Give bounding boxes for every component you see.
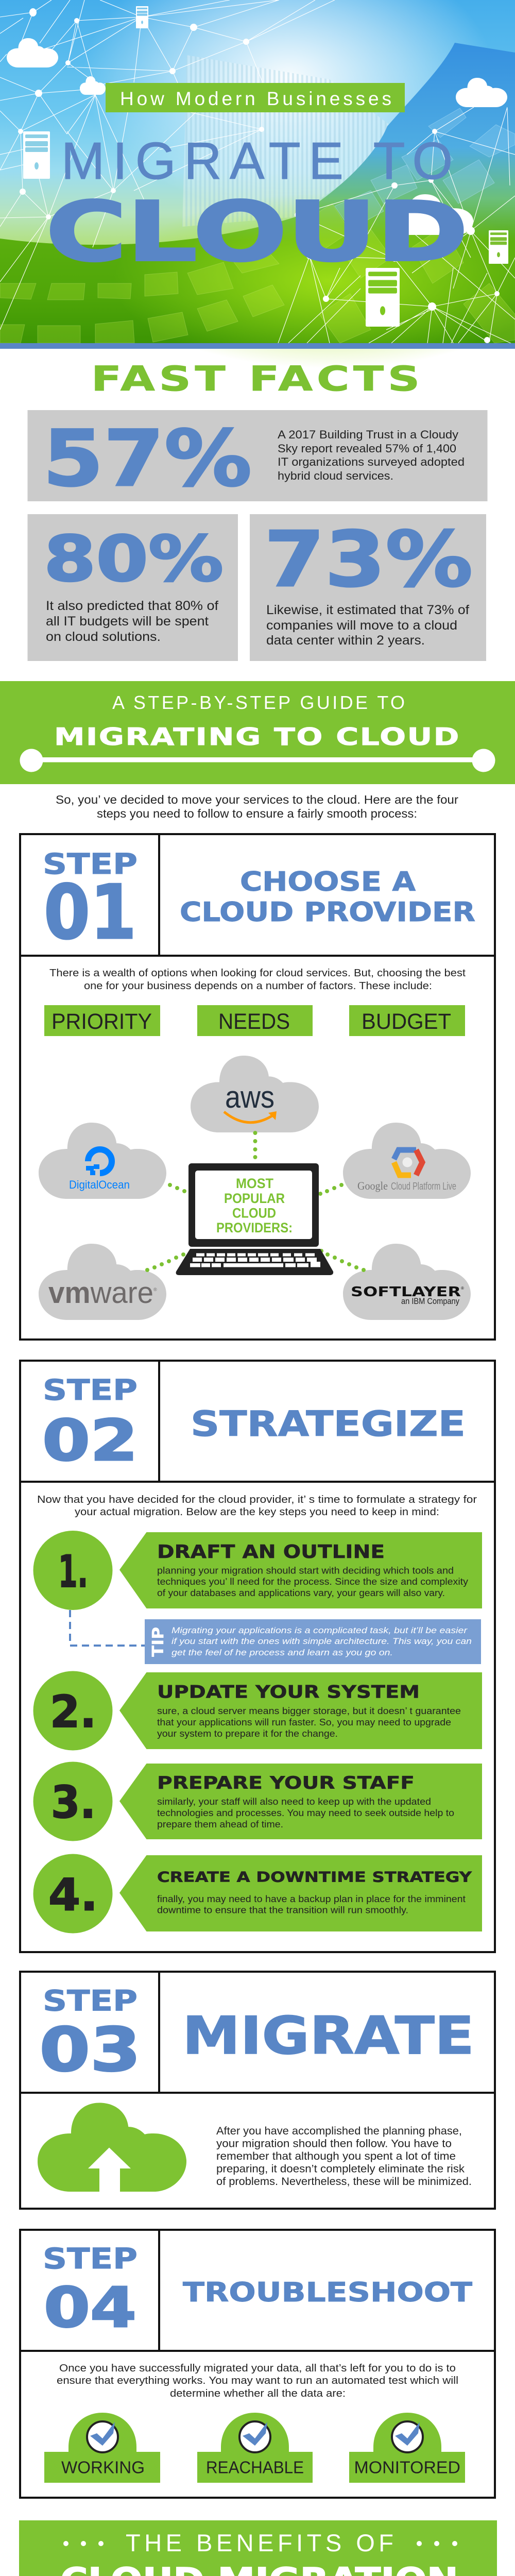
cloud: softlayer: ®: [461, 1286, 464, 1291]
tip callout: TIP: [149, 1627, 167, 1657]
step frame: [20, 1361, 495, 1952]
item 1: 1.: [58, 1546, 88, 1598]
banner kicker: A STEP-BY-STEP GUIDE TO: [112, 692, 405, 713]
panel: 73 percent fact: [250, 514, 486, 661]
icon: laptop: [176, 1163, 333, 1275]
panel: 80 percent fact: [28, 514, 238, 661]
panel: 57 percent fact: [28, 410, 487, 504]
heading: fast facts: FAST FACTS: [91, 359, 424, 399]
decorative dots: [63, 2541, 457, 2546]
step text: [216, 2125, 472, 2188]
curved building: [0, 43, 515, 343]
fact text: Likewise, it estimated that 73% of: [266, 603, 469, 617]
step text: determine whether all the data are:: [170, 2388, 346, 2399]
pale tower: [182, 55, 391, 227]
badge: working: [44, 2413, 160, 2483]
step frame: [20, 834, 495, 1340]
network lines: [0, 0, 515, 345]
laptop screen text: CLOUD: [232, 1206, 276, 1221]
badge: reachable: REACHABLE: [206, 2458, 304, 2477]
laptop screen text: [216, 1176, 293, 1235]
panel: step 02: [20, 1361, 495, 1952]
hero subtitle box: [106, 83, 405, 112]
badge: reachable: [197, 2413, 313, 2483]
fact text: companies will move to a cloud: [266, 618, 457, 633]
tip callout: [145, 1619, 481, 1664]
step intro text: [37, 1494, 477, 1518]
item 4: 4.: [48, 1869, 98, 1921]
hero subtitle box: How Modern Businesses: [120, 88, 391, 109]
cloud: google cloud platform: Cloud Platform Live: [391, 1181, 456, 1192]
step label: STEP: [43, 1985, 138, 2018]
fact text: A 2017 Building Trust in a Cloudy: [278, 428, 458, 441]
fact text: [278, 428, 465, 482]
step text: [57, 2363, 458, 2399]
cloud: google cloud platform: Google: [357, 1179, 388, 1192]
cloud: digitalocean: [39, 1123, 166, 1199]
icon: clouds: [7, 38, 507, 235]
item 3: 3.: [51, 1777, 96, 1828]
fact text: data center within 2 years.: [266, 633, 425, 648]
fact text: [46, 599, 218, 644]
lime light on building: [113, 193, 515, 368]
panel: benefits heading: [19, 2520, 497, 2576]
step intro text: [49, 967, 466, 992]
item 3: prepare them ahead of time.: [157, 1819, 283, 1829]
fact text: IT organizations surveyed adopted: [278, 455, 465, 468]
fact text: all IT budgets will be spent: [46, 614, 209, 629]
cloud: digitalocean: DigitalOcean: [69, 1178, 130, 1191]
icon: upload cloud: [38, 2103, 186, 2192]
tip callout: if you start with the ones with simple architecture. This way, you can: [171, 1636, 472, 1646]
item 1: DRAFT AN OUTLINE: [157, 1541, 385, 1563]
panel: step 03: [20, 1972, 495, 2209]
step intro text: Now that you have decided for the cloud provider, it’ s time to formulate a strategy for: [37, 1494, 477, 1505]
benefits kicker: THE BENEFITS OF: [126, 2529, 393, 2556]
intro text: steps you need to follow to ensure a fairly smooth process:: [97, 807, 417, 820]
stat: 73%: 73%: [264, 515, 473, 604]
hero light glow: [82, 0, 494, 211]
step label: STEP: [43, 1374, 138, 1406]
blue tower windows: [335, 108, 515, 229]
item 3: technologies and processes. You may need to seek outside help to: [157, 1808, 454, 1818]
step frame: [20, 1972, 495, 2209]
step text: of problems. Nevertheless, these will be minimized.: [216, 2176, 472, 2188]
tip callout: Migrating your applications is a complicated task, but it’ll be easier: [171, 1625, 468, 1635]
step text: remember that although you spent a lot of time: [216, 2150, 456, 2162]
factor: needs: NEEDS: [218, 1009, 290, 1034]
panel: step 01: [20, 834, 495, 1340]
step title: STRATEGIZE: [191, 1404, 466, 1445]
cloud: softlayer: SOFTLAYER: [351, 1284, 461, 1300]
step text: Once you have successfully migrated your data, all that’s left for you to do is to: [59, 2363, 456, 2374]
item 1: of your databases and applications vary, your gears will also vary.: [157, 1588, 445, 1598]
step number: 03: [39, 2014, 141, 2085]
cloud: aws: aws: [225, 1080, 274, 1114]
item 2: UPDATE YOUR SYSTEM: [157, 1682, 420, 1702]
hero title line 1: MIGRATE TO: [61, 132, 453, 190]
stat: 57%: 57%: [43, 414, 252, 504]
step text: After you have accomplished the planning phase,: [216, 2125, 462, 2137]
step title: MIGRATE: [182, 2005, 474, 2066]
laptop screen text: MOST: [236, 1176, 273, 1191]
item 1: planning your migration should start with deciding which tools and: [157, 1565, 454, 1575]
badge: monitored: [349, 2413, 465, 2483]
hero banner: [0, 0, 515, 368]
step text: preparing, it doesn’t completely eliminate the risk: [216, 2163, 465, 2175]
banner title: MIGRATING TO CLOUD: [54, 723, 460, 751]
item 2: sure, a cloud server means bigger storage, but it doesn’ t guarantee: [157, 1706, 461, 1716]
step number: 02: [42, 1408, 138, 1473]
badge: monitored: MONITORED: [354, 2458, 460, 2477]
cloud: softlayer: [343, 1244, 471, 1320]
tip callout: get the feel of he process and learn as you go on.: [171, 1648, 393, 1657]
fact text: It also predicted that 80% of: [46, 599, 218, 613]
step frame: [20, 2230, 495, 2498]
network nodes: [18, 8, 500, 343]
cloud: softlayer: an IBM Company: [401, 1296, 459, 1306]
factor: budget: BUDGET: [362, 1009, 451, 1034]
laptop screen text: PROVIDERS:: [216, 1220, 293, 1235]
step text: ensure that everything works. You may want to run an automated test which will: [57, 2375, 458, 2386]
fact text: Sky report revealed 57% of 1,400: [278, 442, 456, 455]
item 3: similarly, your staff will also need to keep up with the updated: [157, 1797, 431, 1807]
item 4: finally, you may need to have a backup plan in place for the imminent: [157, 1894, 466, 1904]
item 3: PREPARE YOUR STAFF: [157, 1773, 415, 1793]
step number: 04: [44, 2276, 136, 2340]
step title: CHOOSE A: [240, 867, 416, 897]
fact text: [266, 603, 469, 648]
intro text: So, you’ ve decided to move your services to the cloud. Here are the four: [56, 793, 458, 806]
factor: priority: PRIORITY: [52, 1009, 152, 1034]
blue divider bar: [0, 343, 515, 349]
tip connector: [70, 1610, 145, 1646]
item 2: your system to prepare it for the change.: [157, 1728, 338, 1739]
panel: guide banner: [0, 681, 515, 784]
building windows: [0, 204, 515, 343]
cloud: vmware: ®: [153, 1287, 157, 1292]
fact text: on cloud solutions.: [46, 630, 161, 644]
step number: 01: [44, 869, 136, 956]
step title: TROUBLESHOOT: [183, 2277, 473, 2308]
item 2: 2.: [50, 1686, 96, 1738]
hero sky background: [0, 0, 515, 343]
step text: your migration should then follow. You have to: [216, 2138, 452, 2149]
item 1: techniques you’ ll need for the process. Since the size and complexity: [157, 1577, 468, 1587]
item 2: that your applications will run faster. So, you may need to upgrade: [157, 1717, 451, 1727]
intro text: [56, 793, 458, 820]
step title: CLOUD PROVIDER: [180, 897, 475, 928]
factor: needs: [197, 1005, 313, 1036]
step title: [180, 867, 475, 928]
item 2: [33, 1671, 482, 1751]
cloud: vmware: [39, 1244, 166, 1320]
item 4: [33, 1854, 482, 1933]
stat: 80%: 80%: [44, 522, 224, 596]
factor: budget: [349, 1005, 465, 1036]
cloud: google cloud platform: [343, 1123, 471, 1199]
step intro text: one for your business depends on a number of factors. These include:: [84, 980, 432, 992]
step label: STEP: [43, 2242, 138, 2275]
step intro text: There is a wealth of options when looking for cloud services. But, choosing the best: [49, 967, 466, 979]
step label: STEP: [43, 848, 138, 880]
panel: step 04: [20, 2230, 495, 2498]
icon: servers: [23, 6, 508, 327]
step intro text: your actual migration. Below are the key steps you need to keep in mind:: [75, 1506, 439, 1518]
item 4: CREATE A DOWNTIME STRATEGY: [157, 1868, 472, 1886]
laptop screen text: POPULAR: [224, 1191, 285, 1206]
banner rule: [20, 749, 495, 772]
cloud: vmware: vmware: [48, 1276, 153, 1310]
item 4: downtime to ensure that the transition will run smoothly.: [157, 1905, 408, 1916]
cloud: aws: [191, 1056, 319, 1132]
badge: working: WORKING: [61, 2458, 145, 2477]
hero title line 2: CLOUD: [46, 184, 468, 280]
item 3: [33, 1762, 482, 1841]
connector dots: [145, 1131, 366, 1272]
item 1: [33, 1531, 482, 1610]
fact text: hybrid cloud services.: [278, 469, 393, 482]
